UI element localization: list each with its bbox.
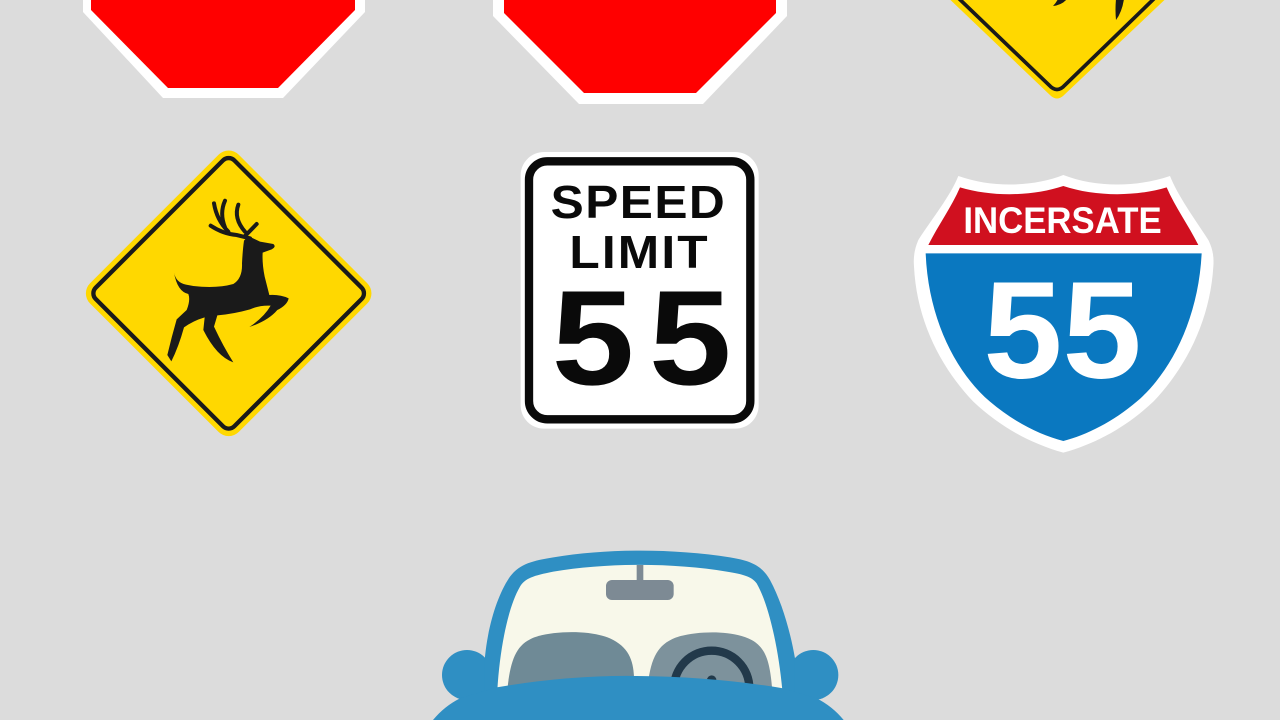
text: 55: 55 [552,264,746,414]
text: 55: 55 [983,254,1142,408]
steering wheel [674,651,749,720]
text: INCERSATE: INCERSATE [963,199,1162,241]
stop sign: top centre, cropped [493,0,787,104]
stop sign: top left, cropped [83,0,365,98]
left seat [507,632,634,690]
interstate shield [914,175,1214,453]
car: front view [432,551,845,720]
text: LIMIT: LIMIT [569,228,710,279]
text: SPEED: SPEED [551,178,726,229]
warning diamond: top right, cropped [940,0,1175,98]
right seat [647,632,772,690]
rear-view mirror [606,565,674,600]
speed limit sign [521,152,759,429]
icon: deer silhouette [167,201,289,362]
deer crossing sign [80,145,377,442]
car hood [432,676,845,720]
